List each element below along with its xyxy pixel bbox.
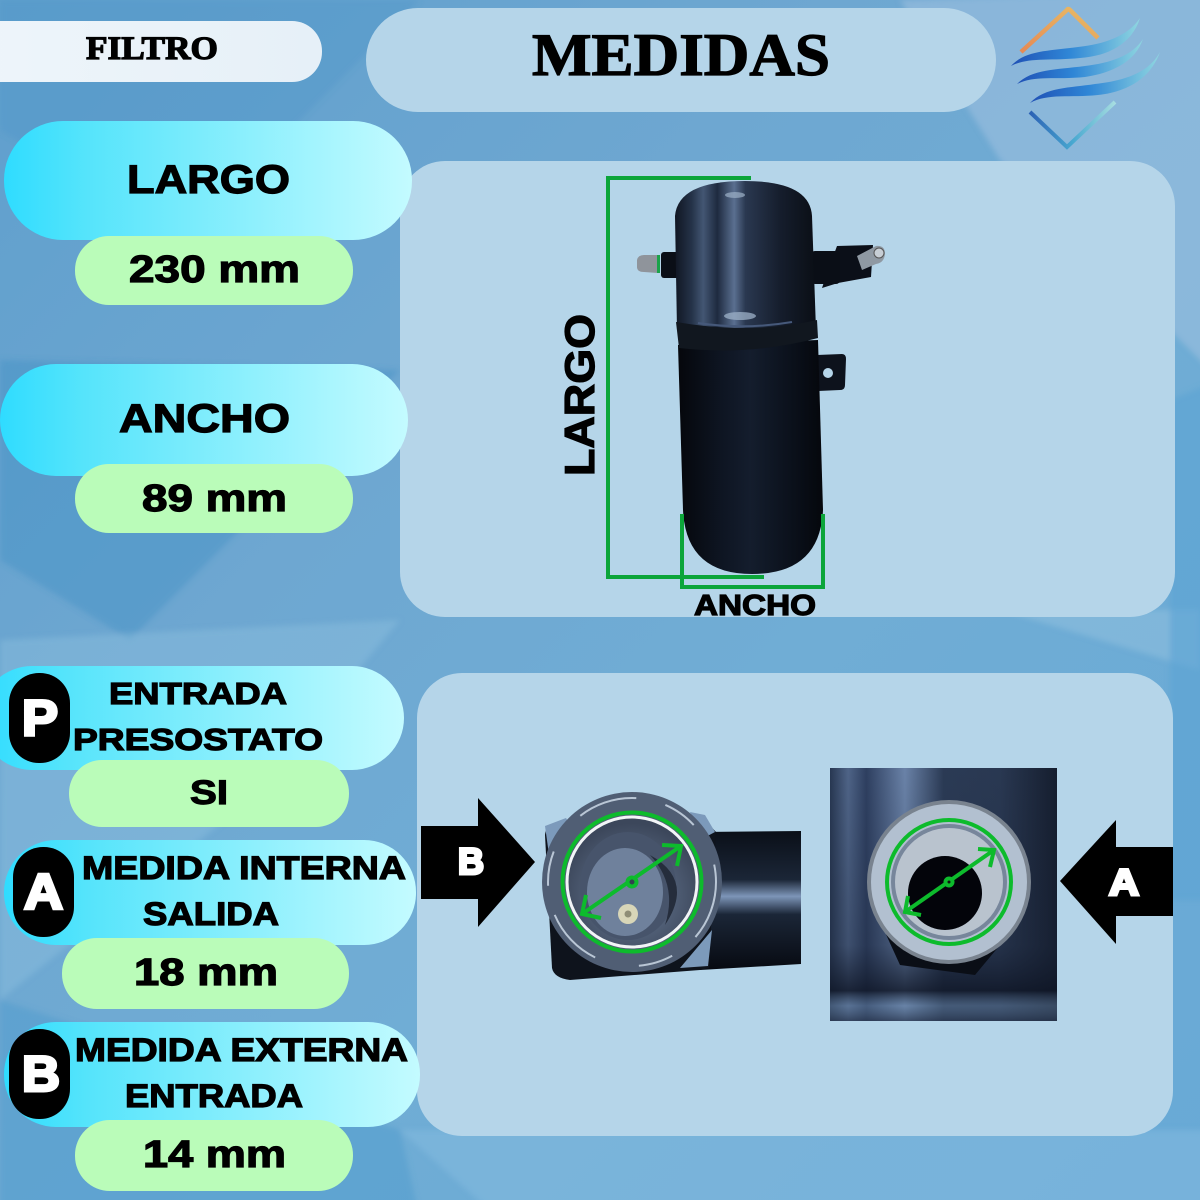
ancho panel xyxy=(0,364,408,476)
medida interna panel: SALIDA xyxy=(143,896,279,932)
measure ring A xyxy=(887,820,1011,944)
photo: fitting B xyxy=(542,792,801,980)
externa value xyxy=(75,1120,353,1191)
interna value xyxy=(62,938,349,1009)
badge P xyxy=(9,673,70,763)
lower body xyxy=(678,340,823,574)
entrada presostato panel: ENTRADA xyxy=(109,676,287,711)
medida externa panel xyxy=(4,1022,420,1127)
collar xyxy=(676,320,818,350)
logo xyxy=(1011,9,1160,147)
largo value xyxy=(75,236,353,305)
largo label: LARGO xyxy=(556,314,603,476)
largo panel: LARGO xyxy=(127,158,290,202)
title: medidas: MEDIDAS xyxy=(532,22,830,88)
entrada presostato panel xyxy=(0,666,404,770)
badge A xyxy=(13,847,74,937)
measure ring B xyxy=(562,812,702,952)
ancho value xyxy=(75,464,353,533)
filtro label xyxy=(0,21,322,82)
badge A: A xyxy=(24,864,63,920)
arrow B xyxy=(421,798,535,927)
entrada presostato panel: PRESOSTATO xyxy=(73,722,323,757)
photo: fitting A xyxy=(830,768,1057,1021)
arrow A: A xyxy=(1109,862,1139,903)
badge P: P xyxy=(22,690,58,746)
left fitting xyxy=(661,252,682,278)
ancho bracket xyxy=(682,514,823,587)
filtro label: FILTRO xyxy=(86,31,218,67)
presostato value: SI xyxy=(190,774,228,812)
upper body xyxy=(675,181,816,338)
badge B xyxy=(9,1029,70,1119)
mounting tab xyxy=(817,354,846,391)
ancho value: 89 mm xyxy=(142,478,287,520)
panel: filter dimensions xyxy=(400,161,1175,622)
title: medidas xyxy=(366,8,996,112)
largo panel xyxy=(4,121,412,240)
largo value: 230 mm xyxy=(129,249,300,291)
largo bracket xyxy=(608,178,764,577)
medida interna panel xyxy=(4,840,416,945)
medida externa panel: MEDIDA EXTERNA xyxy=(75,1032,408,1068)
ancho panel: ANCHO xyxy=(119,397,290,441)
interna value: 18 mm xyxy=(134,952,278,994)
right fitting xyxy=(822,245,873,288)
arrow B: B xyxy=(458,841,484,882)
badge B: B xyxy=(22,1046,60,1102)
panel: fitting details xyxy=(417,673,1173,1136)
medida interna panel: MEDIDA INTERNA xyxy=(82,850,406,886)
ancho label: ANCHO xyxy=(694,590,816,622)
externa value: 14 mm xyxy=(143,1134,286,1176)
arrow A xyxy=(1060,820,1173,944)
presostato value xyxy=(69,760,349,827)
filter photo xyxy=(637,181,885,574)
medida externa panel: ENTRADA xyxy=(125,1078,303,1114)
